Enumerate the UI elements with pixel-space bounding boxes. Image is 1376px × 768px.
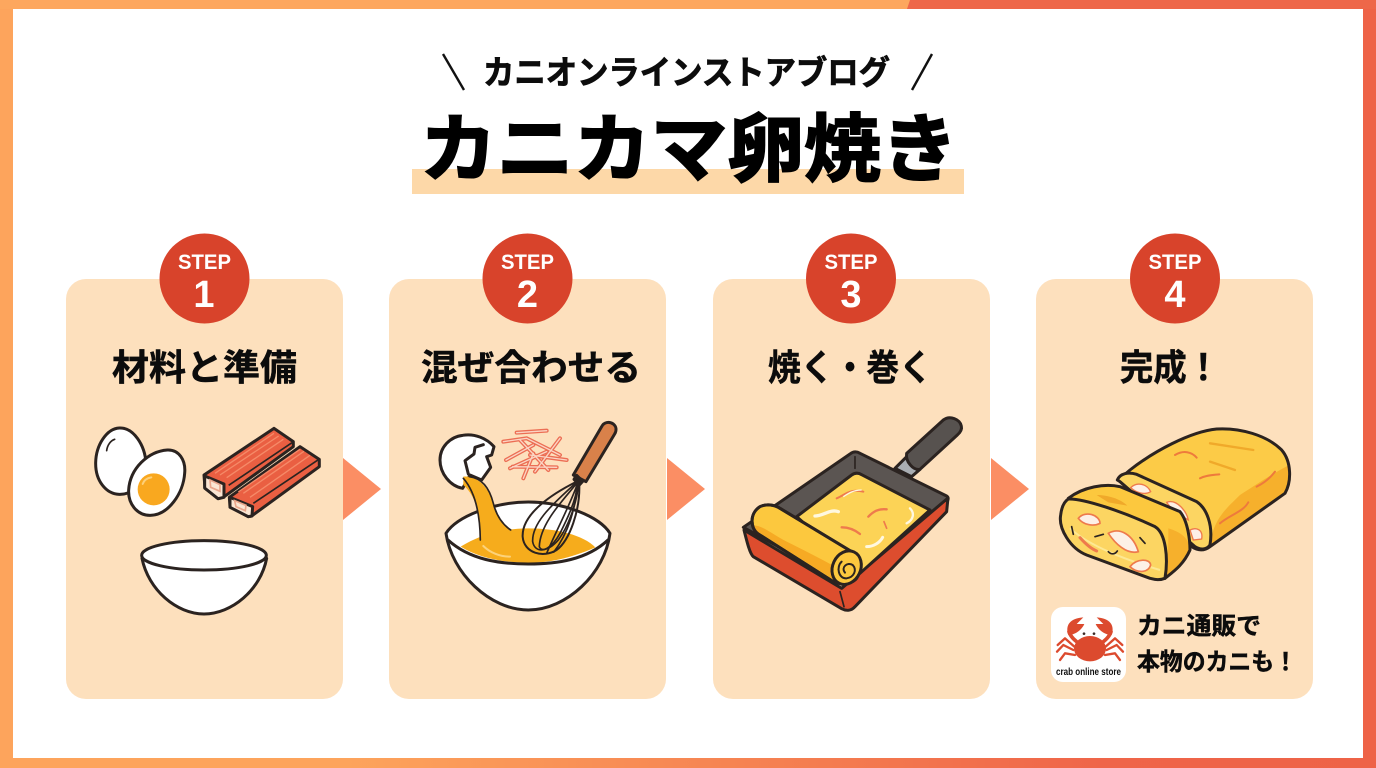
icon: egg pour	[463, 477, 511, 541]
badge: step 4	[1130, 234, 1220, 324]
heading: step 4: 完成！	[1120, 339, 1220, 391]
badge: step 4: STEP	[1148, 251, 1202, 274]
heading: step 3: 焼く・巻く	[768, 339, 932, 391]
title with highlight: カニカマ卵焼き	[420, 90, 958, 197]
icon: front slice face	[1060, 499, 1166, 580]
icon: empty bowl	[142, 558, 267, 614]
icon: rolled omelette	[752, 505, 859, 583]
logo: crab online store	[1051, 607, 1126, 682]
arrow: step 2 to 3	[667, 458, 705, 520]
icon: whisk handle	[573, 422, 616, 482]
egg mixture	[461, 528, 595, 563]
icon: whisk	[523, 482, 579, 554]
promo text	[1137, 606, 1297, 677]
icon: pan handle	[895, 457, 920, 477]
badge: step 1	[160, 234, 250, 324]
icon: crab stick front	[229, 447, 319, 517]
icon: bowl, egg, crab shreds and whisk	[440, 422, 616, 610]
badge: step 2	[482, 234, 572, 324]
badge: step 2: 2	[517, 274, 538, 316]
icon: pan body	[743, 452, 948, 587]
badge: step 4: 4	[1164, 274, 1186, 316]
icon: front slice top	[1068, 485, 1190, 578]
heading: step 1: 材料と準備	[112, 339, 297, 391]
badge: step 1: STEP	[178, 251, 231, 274]
panel: step 4	[1036, 234, 1313, 699]
promo text: 本物のカニも！	[1137, 642, 1297, 677]
omelette sheet	[797, 473, 930, 573]
promo text: カニ通販で	[1137, 606, 1261, 641]
badge: step 2: STEP	[501, 251, 554, 274]
icon: halved egg	[129, 450, 185, 515]
badge: step 3: 3	[840, 274, 862, 316]
pan red wall	[744, 498, 948, 610]
panel: step 2	[389, 234, 666, 699]
heading: step 2: 混ぜ合わせる	[421, 339, 641, 391]
icon: crab stick back	[204, 428, 293, 499]
panel: step 1	[66, 234, 343, 699]
icon: back slice	[1117, 473, 1211, 549]
icon: crab	[1057, 617, 1123, 661]
arrow: step 3 to 4	[991, 458, 1029, 520]
badge: step 3: STEP	[824, 251, 878, 274]
badge: step 3	[806, 234, 896, 324]
icon: tamagoyaki pan with rolled omelette	[743, 418, 962, 610]
icon: long omelette block	[1118, 429, 1290, 550]
icon: eggs, crab sticks and bowl	[96, 428, 319, 614]
icon: whole egg	[96, 428, 146, 494]
icon: mixing bowl	[446, 502, 610, 610]
icon: crab shreds	[503, 431, 567, 478]
icon: broken eggshell	[440, 435, 494, 488]
arrow: step 1 to 2	[343, 458, 381, 520]
logo: crab online store: crab online store	[1056, 667, 1121, 678]
panel: step 3	[713, 234, 990, 699]
icon: sliced tamagoyaki	[1060, 429, 1290, 580]
badge: step 1: 1	[193, 274, 215, 316]
header subtitle: カニオンラインストアブログ	[483, 46, 890, 94]
